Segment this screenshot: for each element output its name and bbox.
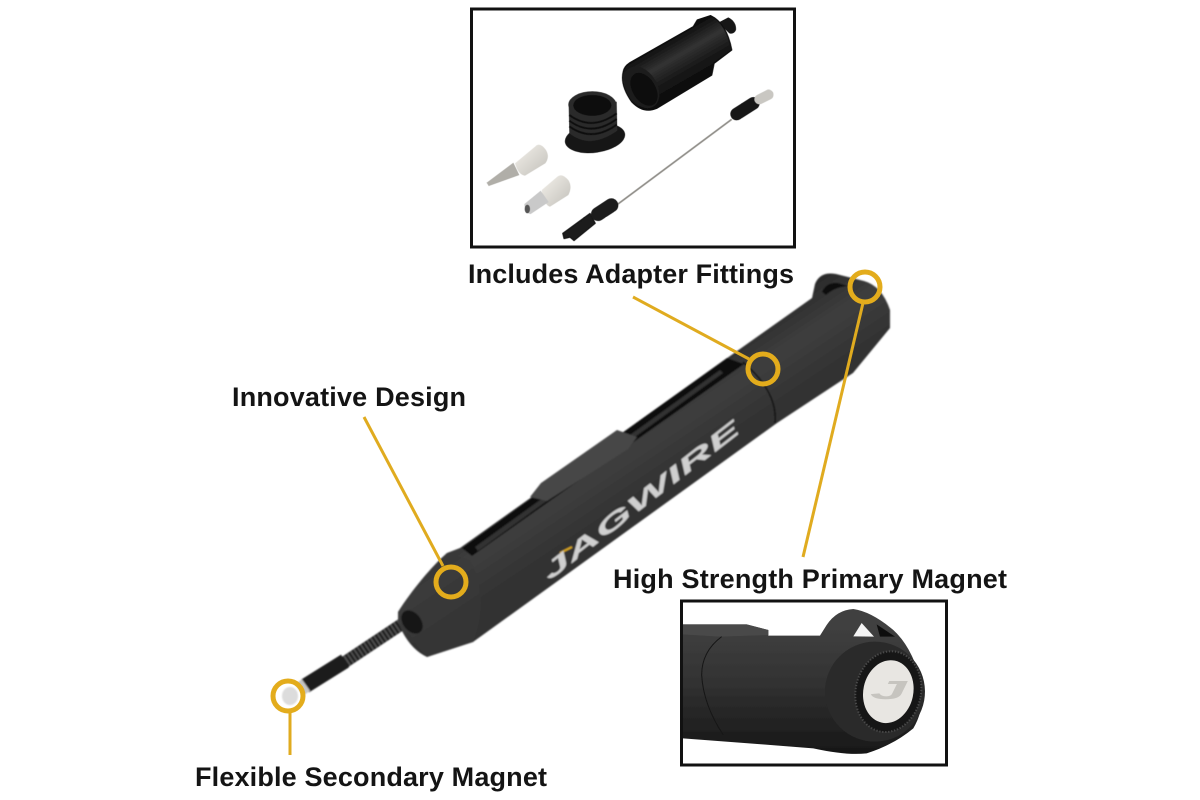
callout: high strength primary magnet <box>613 272 1007 594</box>
loop hole <box>853 623 874 637</box>
flexible spring neck <box>282 618 411 705</box>
end face <box>816 632 934 751</box>
barrel adapter <box>524 175 570 214</box>
slider ledge <box>683 624 768 637</box>
logo <box>537 414 747 585</box>
main tube <box>398 273 890 657</box>
callout: high strength primary magnet: High Strength Primary Magnet <box>613 564 1007 594</box>
callout: innovative design: Innovative Design <box>232 382 466 412</box>
cap body <box>683 609 922 754</box>
black cylinder <box>617 16 736 115</box>
magnet disc <box>857 655 919 728</box>
panel: adapter fittings inset <box>472 9 794 247</box>
callout: includes adapter fittings: Includes Adapter Fittings <box>468 259 794 289</box>
callout: includes adapter fittings <box>468 259 794 384</box>
callout: innovative design <box>232 382 466 597</box>
seam <box>743 362 775 423</box>
pointed adapter <box>487 145 548 186</box>
threaded ring <box>563 91 627 157</box>
tool photo: Jagwire body <box>282 273 890 705</box>
callout: flexible secondary magnet <box>195 681 547 792</box>
magnet disc: J <box>870 675 908 705</box>
panel: primary magnet close-up inset <box>682 601 946 765</box>
logo: JAGWIRE <box>537 414 747 585</box>
neck opening <box>397 606 427 638</box>
nose shading <box>398 553 481 657</box>
close-up photo <box>683 609 934 754</box>
lanyard loop <box>822 283 848 295</box>
slot <box>462 358 744 556</box>
wire tool <box>563 95 769 241</box>
slider button <box>530 430 637 501</box>
parts photo <box>487 16 769 241</box>
callout: flexible secondary magnet: Flexible Secondary Magnet <box>195 762 547 792</box>
cap seam <box>702 637 723 735</box>
